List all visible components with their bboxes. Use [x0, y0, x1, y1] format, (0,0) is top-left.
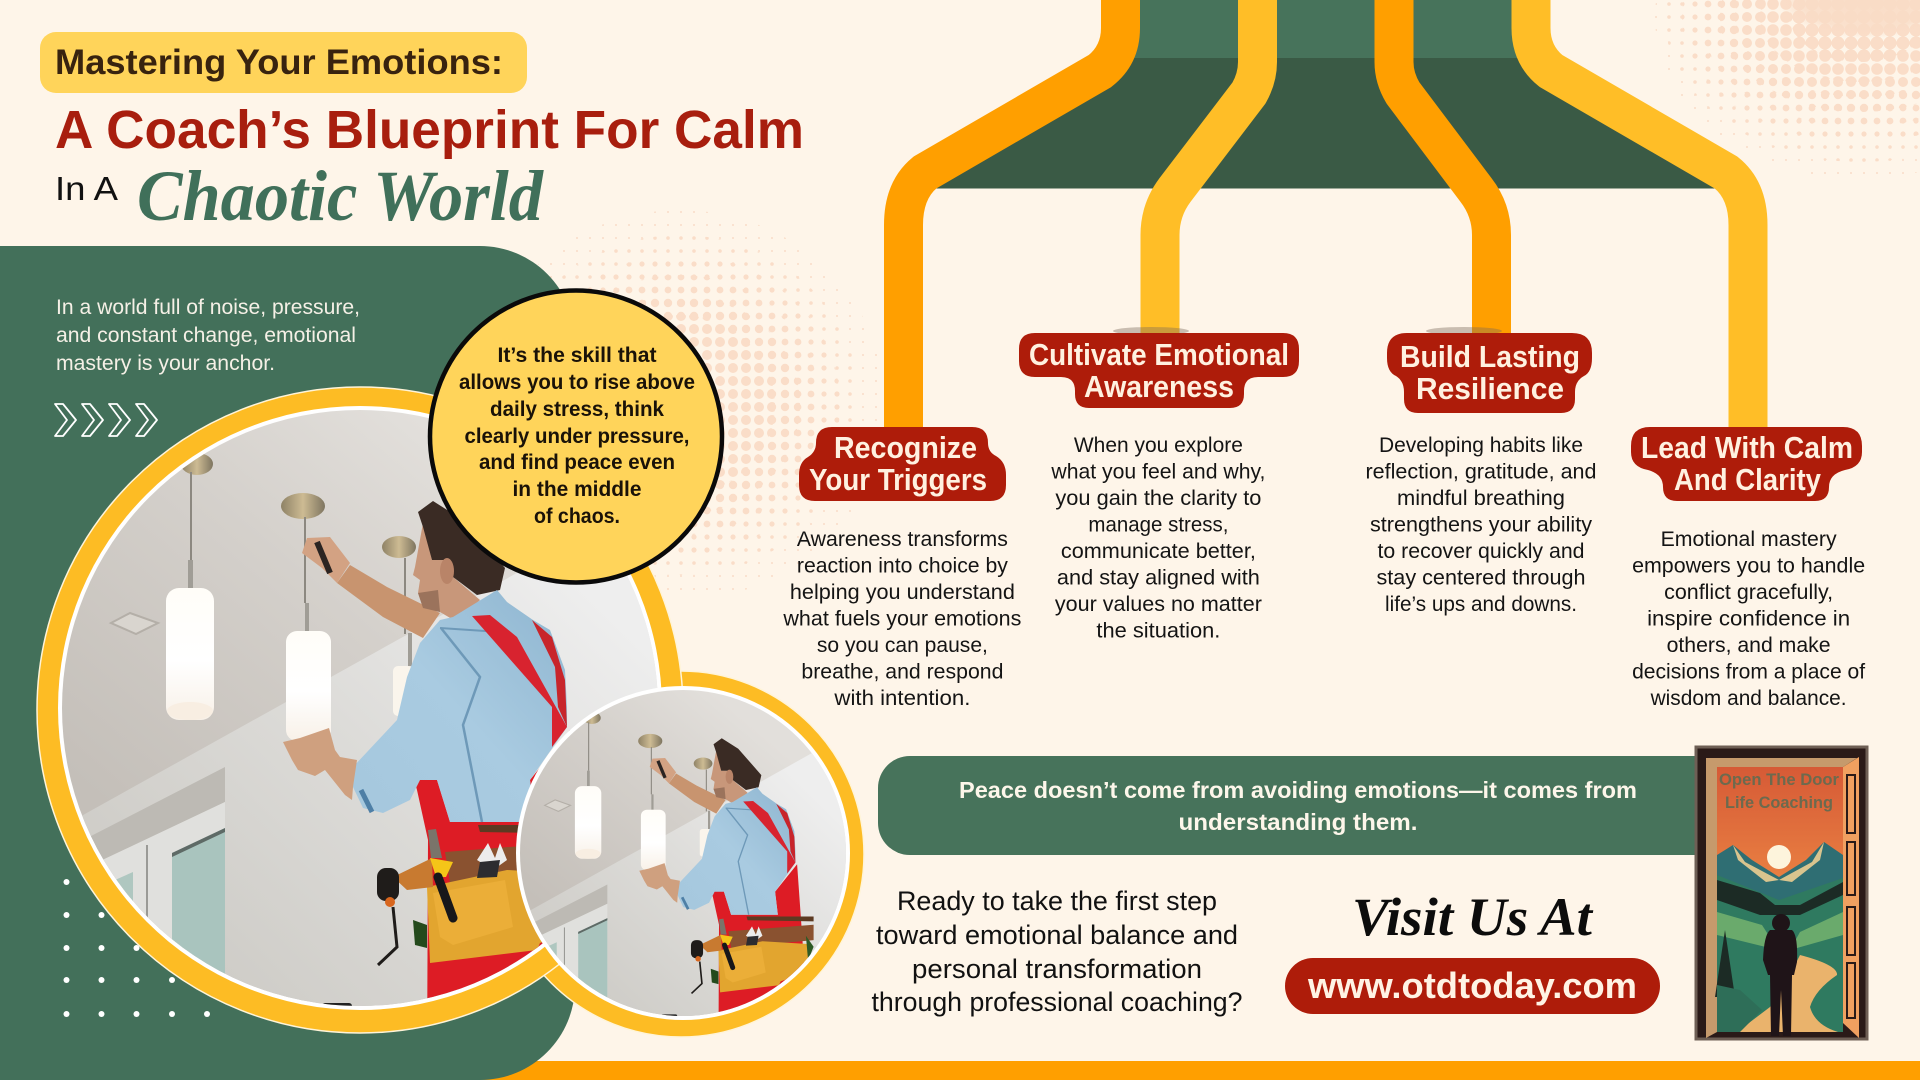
connector line 1: [904, 0, 1120, 440]
step 2 text: and stay aligned with: [1057, 566, 1260, 590]
step 2 tag: Awareness: [1084, 369, 1234, 404]
callout bubble: daily stress, think: [490, 398, 664, 421]
connector line 3: [1394, 0, 1492, 340]
step 3 text: mindful breathing: [1397, 487, 1565, 510]
intro text: [56, 296, 360, 375]
step 3 text: to recover quickly and: [1378, 540, 1584, 563]
step 2 text: you gain the clarity to: [1055, 487, 1261, 510]
step 2 tag: Cultivate Emotional: [1029, 337, 1289, 372]
intro text: and constant change, emotional: [56, 324, 356, 347]
main heading: A Coach’s Blueprint For Calm: [55, 100, 804, 160]
step 4 text: inspire confidence in: [1647, 608, 1850, 630]
callout bubble: allows you to rise above: [459, 371, 695, 394]
bottom orange bar: [480, 1061, 1920, 1080]
icon: chevrons: [55, 404, 157, 436]
connector line 4: [1531, 0, 1748, 440]
step 4 text: Emotional mastery: [1661, 528, 1837, 551]
subheading lead: In A: [55, 170, 118, 207]
step 2 text: [1050, 434, 1265, 642]
step 3 tag: [1387, 327, 1592, 413]
large photo: [30, 380, 700, 1070]
step 1 tag: Recognize: [834, 430, 977, 465]
step 1 text: reaction into choice by: [797, 554, 1008, 578]
step 1 text: so you can pause,: [817, 634, 988, 657]
step 2 text: the situation.: [1096, 620, 1220, 642]
step 3 tag: Build Lasting: [1400, 339, 1580, 374]
step 1 tag: Your Triggers: [809, 462, 987, 497]
step 1 text: helping you understand: [790, 581, 1015, 604]
background halftone: centre: [475, 210, 885, 600]
funnel connector: [904, 0, 1748, 440]
url pill: www.otdtoday.com: [1307, 965, 1637, 1006]
logo: door illustration: [1695, 746, 1868, 1040]
callout bubble: It’s the skill that: [498, 344, 657, 367]
call to action text: personal transformation: [912, 954, 1202, 984]
small photo ring: [498, 671, 864, 1037]
step 1 text: with intention.: [833, 687, 970, 710]
step 4 text: conflict gracefully,: [1664, 581, 1833, 604]
step 1 tag: [799, 427, 1006, 501]
url pill: [1285, 958, 1660, 1014]
step 4 text: decisions from a place of: [1632, 660, 1865, 684]
quote banner: understanding them.: [1178, 809, 1418, 835]
step 2 text: what you feel and why,: [1050, 460, 1265, 484]
step 1 text: breathe, and respond: [801, 660, 1003, 684]
step 1 text: Awareness transforms: [797, 528, 1008, 551]
intro text: mastery is your anchor.: [56, 352, 275, 375]
step 2 text: your values no matter: [1055, 593, 1262, 616]
logo text: [1719, 770, 1839, 812]
step 4 tag: [1631, 427, 1862, 501]
step 4 text: others, and make: [1667, 634, 1831, 657]
decorative dot triangle: [64, 879, 210, 1017]
step 3 text: reflection, gratitude, and: [1366, 460, 1596, 484]
quote banner: Peace doesn’t come from avoiding emotions—it comes from: [959, 777, 1637, 803]
callout bubble: and find peace even: [479, 451, 675, 474]
script heading: Chaotic World: [137, 156, 544, 236]
small photo: [516, 686, 850, 1020]
step 2 text: communicate better,: [1061, 540, 1256, 563]
call to action text: [872, 886, 1242, 1017]
title pill: [40, 32, 527, 93]
connector line 2: [1160, 0, 1258, 340]
callout bubble: in the middle: [512, 478, 642, 501]
step 1 text: what fuels your emotions: [782, 608, 1021, 630]
logo text: Life Coaching: [1725, 793, 1833, 812]
intro text: In a world full of noise, pressure,: [56, 296, 360, 319]
logo text: Open The Door: [1719, 770, 1839, 789]
step 2 text: When you explore: [1074, 434, 1243, 457]
step 4 text: empowers you to handle: [1632, 554, 1865, 578]
step 3 text: [1366, 434, 1596, 616]
step 4 text: [1632, 528, 1865, 710]
title pill: Mastering Your Emotions:: [55, 43, 503, 82]
step 4 text: wisdom and balance.: [1650, 687, 1847, 710]
call to action text: toward emotional balance and: [876, 920, 1238, 950]
step 3 text: strengthens your ability: [1370, 514, 1593, 536]
callout bubble: clearly under pressure,: [464, 425, 690, 448]
call to action text: through professional coaching?: [872, 987, 1242, 1017]
step 2 tag: [1019, 327, 1299, 408]
step 3 text: life’s ups and downs.: [1385, 593, 1577, 616]
background halftone: top right: [1655, 0, 1920, 179]
step 4 tag: Lead With Calm: [1641, 430, 1853, 465]
step 1 text: [782, 528, 1021, 710]
step 2 text: manage stress,: [1088, 514, 1228, 536]
step 3 text: Developing habits like: [1379, 434, 1583, 457]
quote banner: [878, 756, 1697, 855]
callout bubble: [430, 290, 722, 582]
callout bubble: of chaos.: [534, 505, 620, 528]
call to action text: Ready to take the first step: [897, 886, 1217, 916]
title block: [40, 32, 804, 236]
step 4 tag: And Clarity: [1674, 462, 1822, 497]
visit heading: Visit Us At: [1352, 887, 1594, 947]
panel: green left: [0, 246, 575, 1080]
step 3 tag: Resilience: [1416, 371, 1564, 406]
step 3 text: stay centered through: [1376, 566, 1586, 590]
